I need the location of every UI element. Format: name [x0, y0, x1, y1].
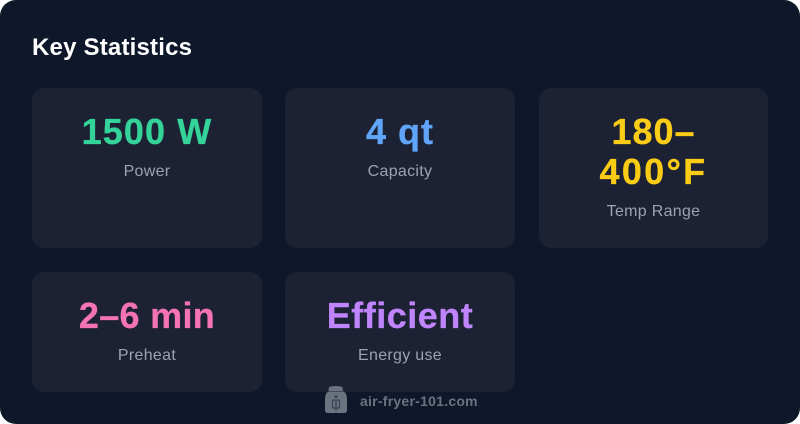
icon: air fryer	[325, 386, 347, 413]
card: power	[32, 88, 262, 248]
card: temp range	[539, 88, 768, 248]
card: temp range: 400°F	[600, 151, 707, 192]
card: energy use: Energy use	[358, 347, 442, 364]
card: capacity	[285, 88, 515, 248]
card: energy use: Efficient	[327, 295, 473, 336]
card: power: 1500 W	[82, 111, 212, 152]
card: power: Power	[124, 163, 170, 180]
card: preheat: 2–6 min	[79, 295, 215, 336]
card: preheat: Preheat	[118, 347, 176, 364]
card: preheat	[32, 272, 262, 392]
card: capacity: 4 qt	[366, 111, 434, 152]
card: energy use	[285, 272, 515, 392]
card: temp range: Temp Range	[607, 203, 700, 220]
watermark text: air-fryer-101.com	[360, 393, 478, 409]
title: Key Statistics	[32, 34, 192, 61]
card: temp range: 180–	[611, 111, 696, 152]
card: capacity: Capacity	[368, 163, 432, 180]
